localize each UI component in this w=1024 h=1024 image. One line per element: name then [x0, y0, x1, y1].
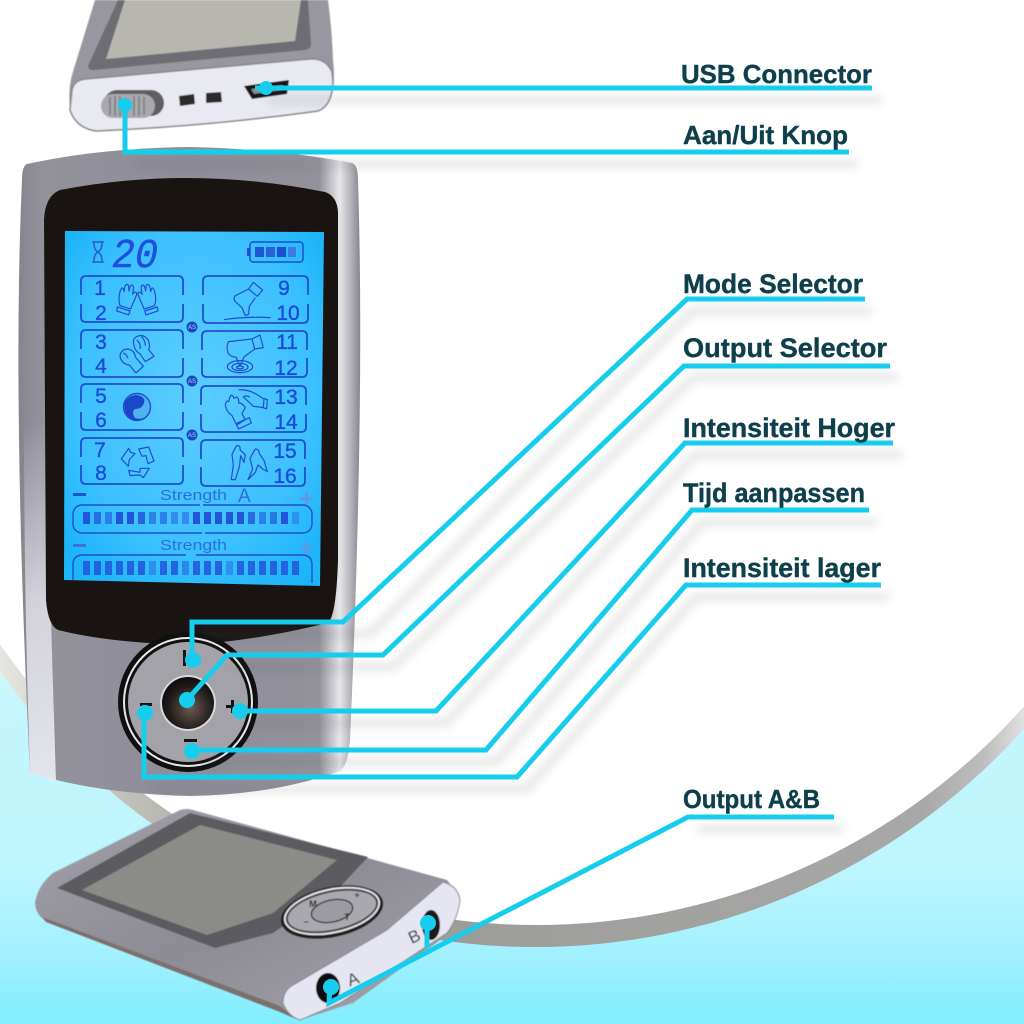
left edge highlight [24, 420, 56, 781]
program box 11-12 [202, 331, 307, 377]
channel A letter: A [238, 486, 251, 507]
program box 1-2 [81, 276, 183, 322]
strength A label: Strength [160, 487, 227, 504]
program box 7-8 [81, 438, 183, 484]
icon: recycle arrows [121, 447, 154, 478]
program box 15-16 [201, 440, 305, 486]
icon: tapping hands [225, 390, 267, 429]
callout: Intensiteit Hoger: Intensiteit Hoger [683, 413, 895, 443]
jack A [316, 973, 340, 1003]
callout: Output A&B: Output A&B [683, 784, 820, 814]
icon: kneading hand [227, 335, 263, 373]
jack letter B: B [405, 926, 424, 948]
callout: Intensiteit lager [137, 553, 881, 777]
main casing [18, 147, 360, 796]
callout: Tijd aanpassen [184, 478, 869, 759]
strength B minus and plus [73, 542, 313, 555]
icon: pressing hand [224, 282, 271, 320]
program numbers: 11 [276, 331, 298, 354]
callout: Mode Selector [185, 269, 865, 668]
callout: Intensiteit Hoger [232, 413, 895, 719]
timer digits: 20 [112, 234, 158, 280]
program numbers: 15 [273, 440, 297, 463]
program numbers: 7 [94, 439, 106, 462]
program numbers: 12 [274, 357, 298, 380]
device: main front view [18, 147, 360, 796]
jack B [422, 910, 440, 940]
callout: Output Selector [179, 333, 890, 708]
angled wheel letters: − [303, 917, 309, 927]
hourglass icon [92, 242, 104, 262]
program box 5-6 [81, 384, 183, 430]
program numbers: 1 [94, 277, 106, 300]
callout: Mode Selector: Mode Selector [683, 269, 863, 299]
angled wheel letters: M [309, 899, 317, 909]
vents [179, 92, 222, 106]
device: angled bottom view [35, 809, 460, 1020]
program box 9-10 [203, 276, 308, 323]
program numbers: 6 [95, 409, 107, 432]
angled wheel letters: + [354, 890, 360, 900]
power switch [101, 90, 164, 118]
AS markers: AS [188, 379, 196, 385]
center button [160, 675, 216, 731]
strength B bar [73, 555, 312, 583]
top device bezel [88, 0, 311, 70]
program numbers: 10 [276, 302, 300, 325]
AS markers: AS [188, 325, 196, 331]
wheel symbols [140, 650, 239, 742]
angled bezel [57, 813, 368, 948]
callout: Output A&B [323, 784, 834, 1003]
angled wheel letters: T [344, 912, 350, 922]
top device lcd [106, 0, 301, 59]
program numbers: 3 [95, 331, 107, 354]
blue lcd [64, 231, 324, 586]
angled wheel letters [303, 890, 360, 927]
usb port [244, 80, 289, 99]
callout: Output Selector: Output Selector [683, 333, 887, 363]
angled end plate [283, 882, 460, 1020]
lcd background [64, 231, 324, 586]
callout: Aan/Uit Knop: Aan/Uit Knop [683, 120, 848, 150]
jack letter A: A [345, 968, 362, 990]
black screen [44, 178, 338, 645]
callout line shadows [135, 100, 903, 829]
program numbers [94, 277, 300, 488]
program numbers: 9 [278, 277, 290, 300]
program numbers: 2 [95, 302, 107, 325]
program box 13-14 [201, 386, 306, 432]
callout: Intensiteit lager: Intensiteit lager [683, 553, 881, 583]
top device end plate [70, 59, 333, 131]
program numbers: 5 [95, 385, 107, 408]
program numbers: 8 [95, 462, 107, 485]
AS markers: AS [188, 433, 196, 439]
strength A bar [73, 505, 312, 533]
angled wheel [276, 877, 388, 947]
icon: fists [120, 336, 154, 373]
icon: yin yang [124, 394, 150, 420]
casing lower skirt [42, 917, 296, 1019]
battery icon [247, 242, 303, 262]
icon: runners [231, 446, 267, 480]
angled casing [35, 809, 460, 1020]
strength A minus and plus [73, 492, 313, 505]
callout: Aan/Uit Knop [118, 98, 849, 152]
callout: Tijd aanpassen: Tijd aanpassen [683, 478, 865, 508]
program numbers: 13 [274, 386, 298, 409]
AS markers [186, 322, 198, 440]
program box 3-4 [81, 330, 183, 377]
icon: open hands [117, 284, 158, 315]
control wheel [118, 632, 258, 772]
device: top edge view [69, 0, 334, 131]
program numbers: 14 [274, 411, 298, 434]
strength B label: Strength [160, 537, 227, 554]
program numbers: 16 [273, 465, 297, 488]
callout: USB Connector [255, 59, 872, 95]
top device casing [69, 0, 334, 108]
angled lcd [82, 825, 337, 935]
program numbers: 4 [95, 355, 107, 378]
callout: USB Connector: USB Connector [681, 59, 872, 89]
